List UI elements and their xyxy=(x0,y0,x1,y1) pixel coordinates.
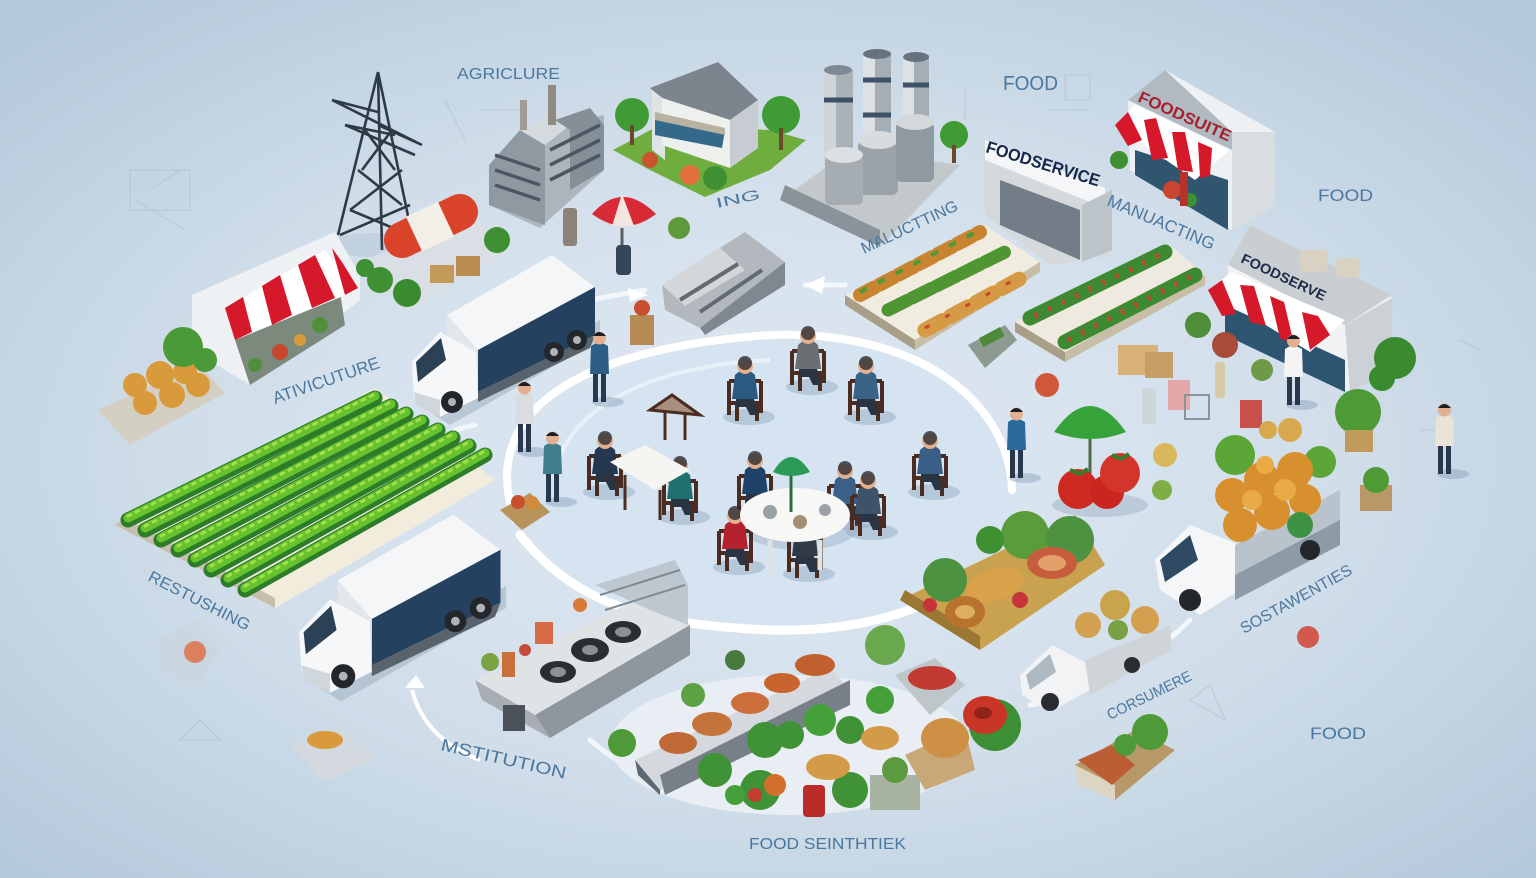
umbrella: green small xyxy=(790,470,792,512)
building: food service xyxy=(983,138,1112,265)
building on lawn xyxy=(613,62,806,197)
tomatoes and green umbrella xyxy=(1035,373,1148,517)
planter bed: food xyxy=(845,225,1040,368)
cafe tables and diners xyxy=(583,326,960,582)
label: farming fragment: ING xyxy=(714,186,762,211)
store goods: right xyxy=(1118,345,1262,500)
label: manufacturing right: MANUACTING xyxy=(1104,191,1218,254)
shop: top right xyxy=(1110,70,1275,230)
label: food right: FOOD xyxy=(1318,186,1373,205)
label: agriculture: AGRICLURE xyxy=(457,66,560,83)
crates: lower right xyxy=(1075,714,1175,800)
shop: right xyxy=(1185,225,1416,410)
kitchen counter xyxy=(475,560,690,738)
shop: left market xyxy=(192,232,360,385)
crate of bread: left xyxy=(98,327,225,445)
crop field xyxy=(115,388,495,608)
label: food lower right: FOOD xyxy=(1310,724,1366,743)
label: agriculture left: ATIVICUTURE xyxy=(270,353,382,408)
label: sustainability: SOSTAWENTIES xyxy=(1238,562,1355,637)
icon: pylon xyxy=(323,72,433,257)
table: left xyxy=(610,445,690,490)
label: distribution: MSTITUTION xyxy=(439,735,568,783)
table: center xyxy=(740,488,850,542)
kitchen machines xyxy=(630,232,785,345)
truck: upper left xyxy=(412,255,600,425)
planter bed: vegetables xyxy=(1015,245,1205,362)
small items: lower left xyxy=(158,620,1319,782)
sign: food suite: FOODSUITE xyxy=(1135,89,1234,145)
label: food top: FOOD xyxy=(1003,73,1058,95)
truck: lower left xyxy=(299,514,506,702)
tank xyxy=(356,212,512,312)
food tray xyxy=(900,511,1105,650)
standing people xyxy=(515,332,1469,507)
faint sketch marks xyxy=(130,75,1480,740)
label: consumer: CORSUMERE xyxy=(1104,668,1194,724)
sign: food service right: FOODSERVE xyxy=(1239,250,1329,304)
label: food bottom: FOOD SEINTHTIEK xyxy=(749,836,906,853)
cycle ring xyxy=(405,276,1190,805)
crate: by ring xyxy=(500,493,550,530)
food pile and delivery truck xyxy=(1155,389,1392,615)
small truck xyxy=(1020,590,1172,712)
silos xyxy=(780,49,968,247)
umbrella: red xyxy=(592,194,690,275)
sign: food service: FOODSERVICE xyxy=(984,138,1102,190)
label: restaurant: RESTUSHING xyxy=(145,568,253,634)
food display table xyxy=(608,625,1021,817)
factory xyxy=(489,85,604,246)
label: manufacturing center: MALUCTTING xyxy=(859,198,961,258)
